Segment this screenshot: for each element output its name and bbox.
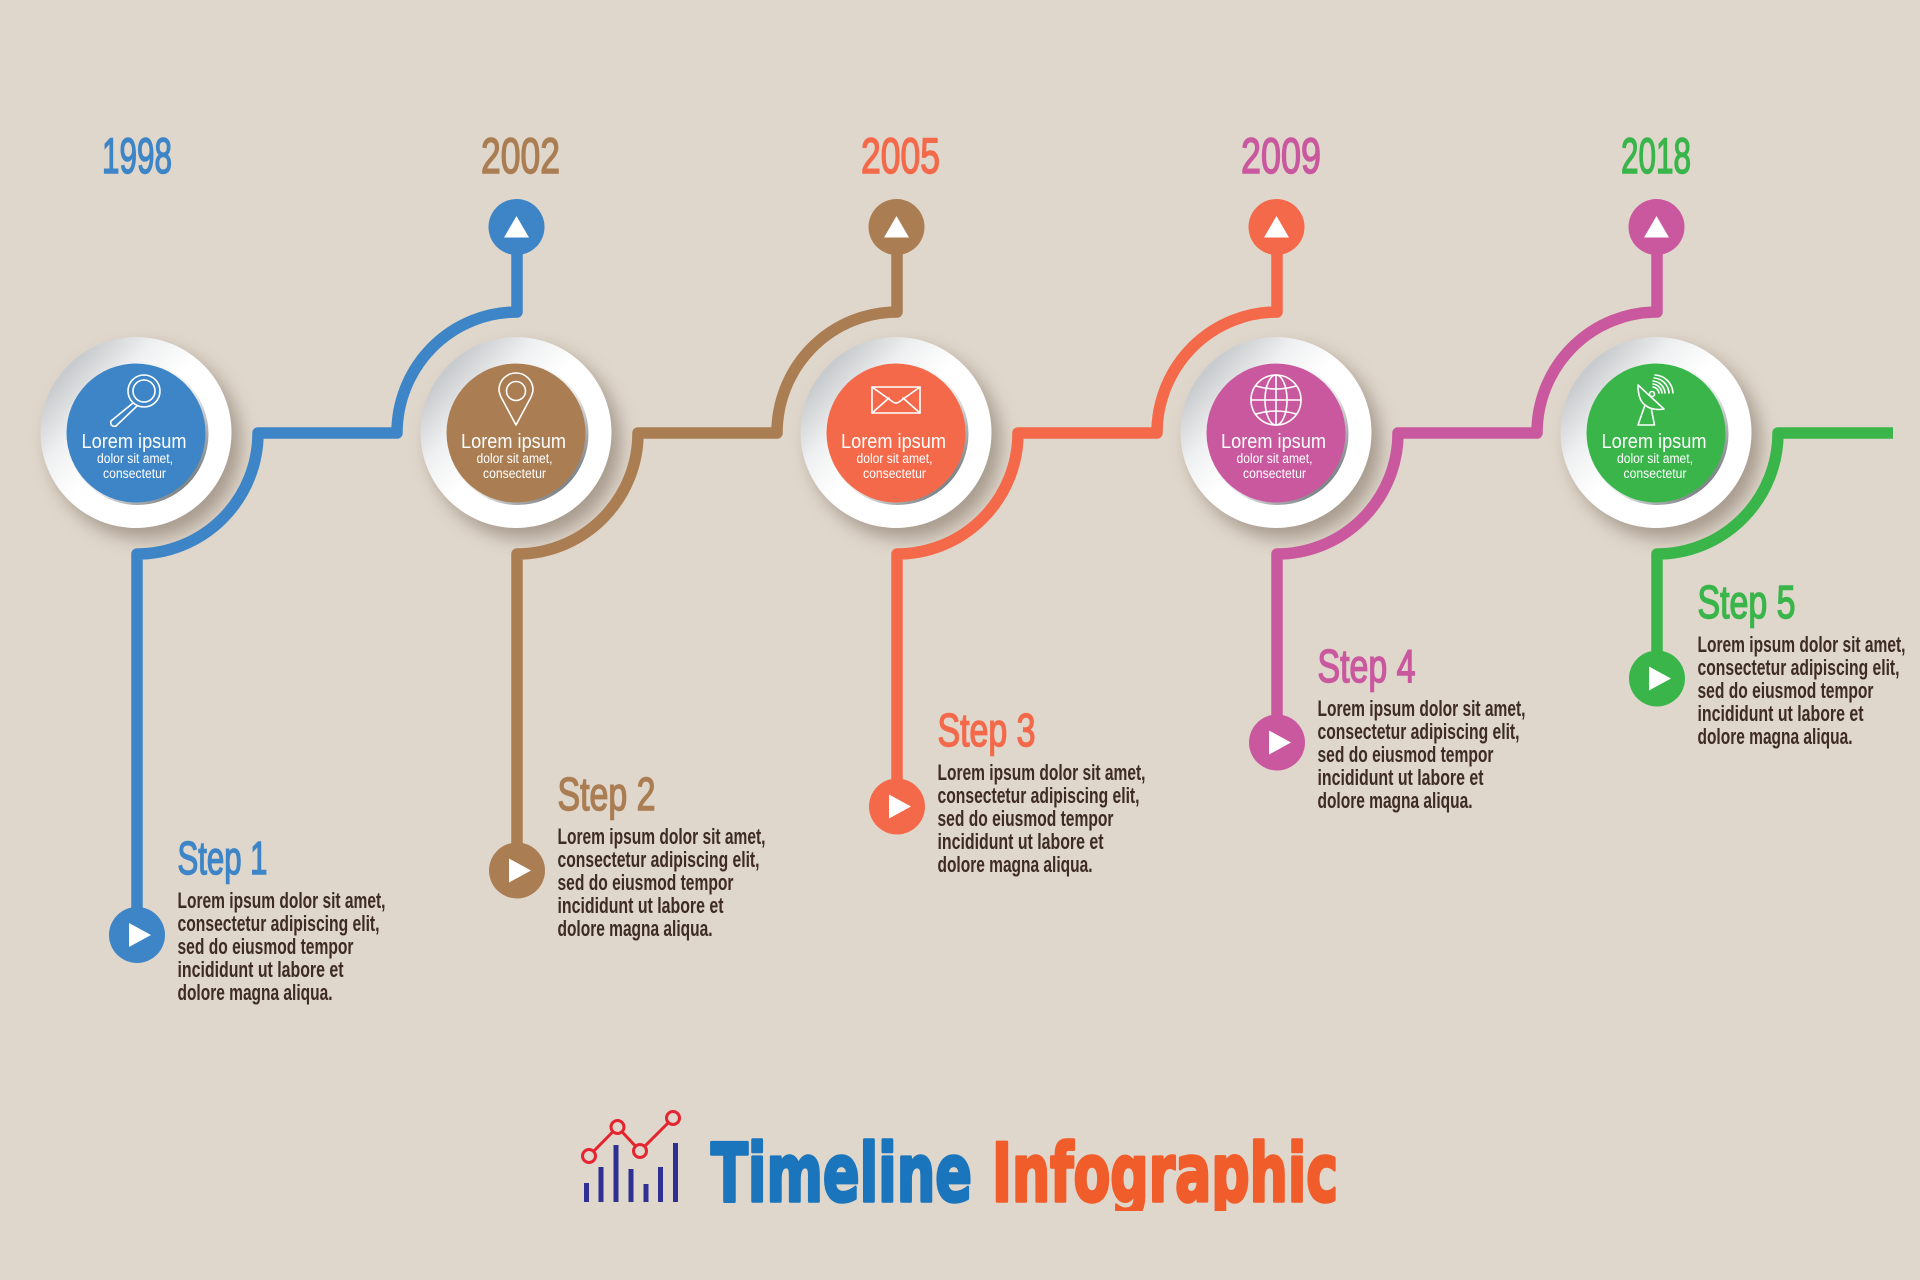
text block: step 5 [1698, 576, 1906, 749]
top dot: step 3 [1248, 199, 1304, 255]
circle label: dolor sit amet, [97, 451, 173, 466]
text block: step 2: Lorem ipsum dolor sit amet, [558, 824, 766, 849]
text block: step 4 [1318, 640, 1526, 813]
text block: step 5: Step 5 [1698, 576, 1796, 628]
disc: step 2 [420, 337, 621, 539]
bottom dot: step 1 [109, 907, 165, 963]
title [710, 1138, 1336, 1211]
text block: step 4: Step 4 [1318, 640, 1416, 692]
bottom dot: step 3 [869, 778, 925, 834]
connector line: step 4 [1277, 228, 1657, 743]
text block: step 4: sed do eiusmod tempor [1318, 742, 1494, 767]
year 2009: 2009 [1241, 128, 1321, 184]
circle label [82, 431, 186, 481]
bottom dot: step 2 [489, 842, 545, 898]
top dot: step 4 [1628, 199, 1684, 255]
circle label: dolor sit amet, [1617, 451, 1693, 466]
circle label [1221, 431, 1326, 481]
connector line: step 2 [517, 228, 897, 871]
text block: step 3: Lorem ipsum dolor sit amet, [938, 760, 1146, 785]
circle label: consectetur [1624, 466, 1687, 481]
circle label: consectetur [1243, 466, 1306, 481]
circle label [841, 431, 946, 481]
connector line: step 5 [1657, 433, 1893, 679]
top dot: step 2 [868, 199, 924, 255]
text block: step 1: Step 1 [178, 832, 268, 884]
connector line: step 1 [137, 228, 517, 935]
text block: step 2: sed do eiusmod tempor [558, 870, 734, 895]
text block: step 1: sed do eiusmod tempor [178, 934, 354, 959]
text block: step 3: consectetur adipiscing elit, [938, 783, 1140, 808]
text block: step 3: dolore magna aliqua. [938, 852, 1092, 877]
text block: step 2: incididunt ut labore et [558, 893, 724, 918]
circle label: Lorem ipsum [841, 431, 946, 453]
icon: magnifier [111, 375, 160, 426]
text block: step 1: incididunt ut labore et [178, 957, 344, 982]
panel: step 3 [800, 199, 1304, 877]
text block: step 2: Step 2 [558, 768, 656, 820]
icon: map pin [499, 373, 533, 425]
circle label [1602, 431, 1706, 481]
circle label: Lorem ipsum [82, 431, 186, 453]
icon: envelope [872, 387, 920, 413]
panel: step 1 [40, 199, 544, 1005]
bottom dot: step 4 [1249, 714, 1305, 770]
top dot: step 1 [488, 199, 544, 255]
text block: step 3: Step 3 [938, 704, 1036, 756]
icon: globe [1251, 375, 1301, 425]
circle label: consectetur [863, 466, 926, 481]
text block: step 3 [938, 704, 1146, 877]
bottom dot: step 5 [1629, 650, 1685, 706]
text block: step 2 [558, 768, 766, 941]
title: Timeline [711, 1127, 972, 1220]
panel: step 5 [1560, 337, 1906, 749]
text block: step 1 [178, 832, 386, 1005]
disc: step 3 [800, 337, 1001, 539]
disc: step 4 [1180, 337, 1381, 539]
text block: step 2: dolore magna aliqua. [558, 916, 712, 941]
year 1998: 1998 [102, 128, 172, 184]
icon: chart logo [582, 1112, 680, 1202]
circle label [461, 431, 566, 481]
text block: step 4: Lorem ipsum dolor sit amet, [1318, 696, 1526, 721]
text block: step 4: consectetur adipiscing elit, [1318, 719, 1520, 744]
circle label: Lorem ipsum [1221, 431, 1326, 453]
text block: step 1: consectetur adipiscing elit, [178, 911, 380, 936]
text block: step 3: sed do eiusmod tempor [938, 806, 1114, 831]
circle label: Lorem ipsum [1602, 431, 1706, 453]
icon: satellite dish [1638, 375, 1673, 425]
text block: step 1: dolore magna aliqua. [178, 980, 332, 1005]
text block: step 4: dolore magna aliqua. [1318, 788, 1472, 813]
disc: step 5 [1560, 337, 1761, 539]
circle label: dolor sit amet, [476, 451, 552, 466]
panel: step 2 [420, 199, 924, 941]
text block: step 1: Lorem ipsum dolor sit amet, [178, 888, 386, 913]
text block: step 3: incididunt ut labore et [938, 829, 1104, 854]
circle label: consectetur [103, 466, 166, 481]
text block: step 5: dolore magna aliqua. [1698, 724, 1852, 749]
connector line: step 3 [897, 228, 1277, 807]
circle label: consectetur [483, 466, 546, 481]
year 2005: 2005 [861, 128, 940, 184]
title: Infographic [992, 1127, 1338, 1220]
year 2018: 2018 [1621, 128, 1691, 184]
circle label: Lorem ipsum [461, 431, 566, 453]
text block: step 4: incididunt ut labore et [1318, 765, 1484, 790]
year 2002: 2002 [481, 128, 560, 184]
year labels [102, 128, 1691, 184]
disc: step 1 [40, 337, 241, 539]
circle label: dolor sit amet, [1236, 451, 1312, 466]
panel: step 4 [1180, 199, 1684, 813]
circle label: dolor sit amet, [856, 451, 932, 466]
text block: step 2: consectetur adipiscing elit, [558, 847, 760, 872]
